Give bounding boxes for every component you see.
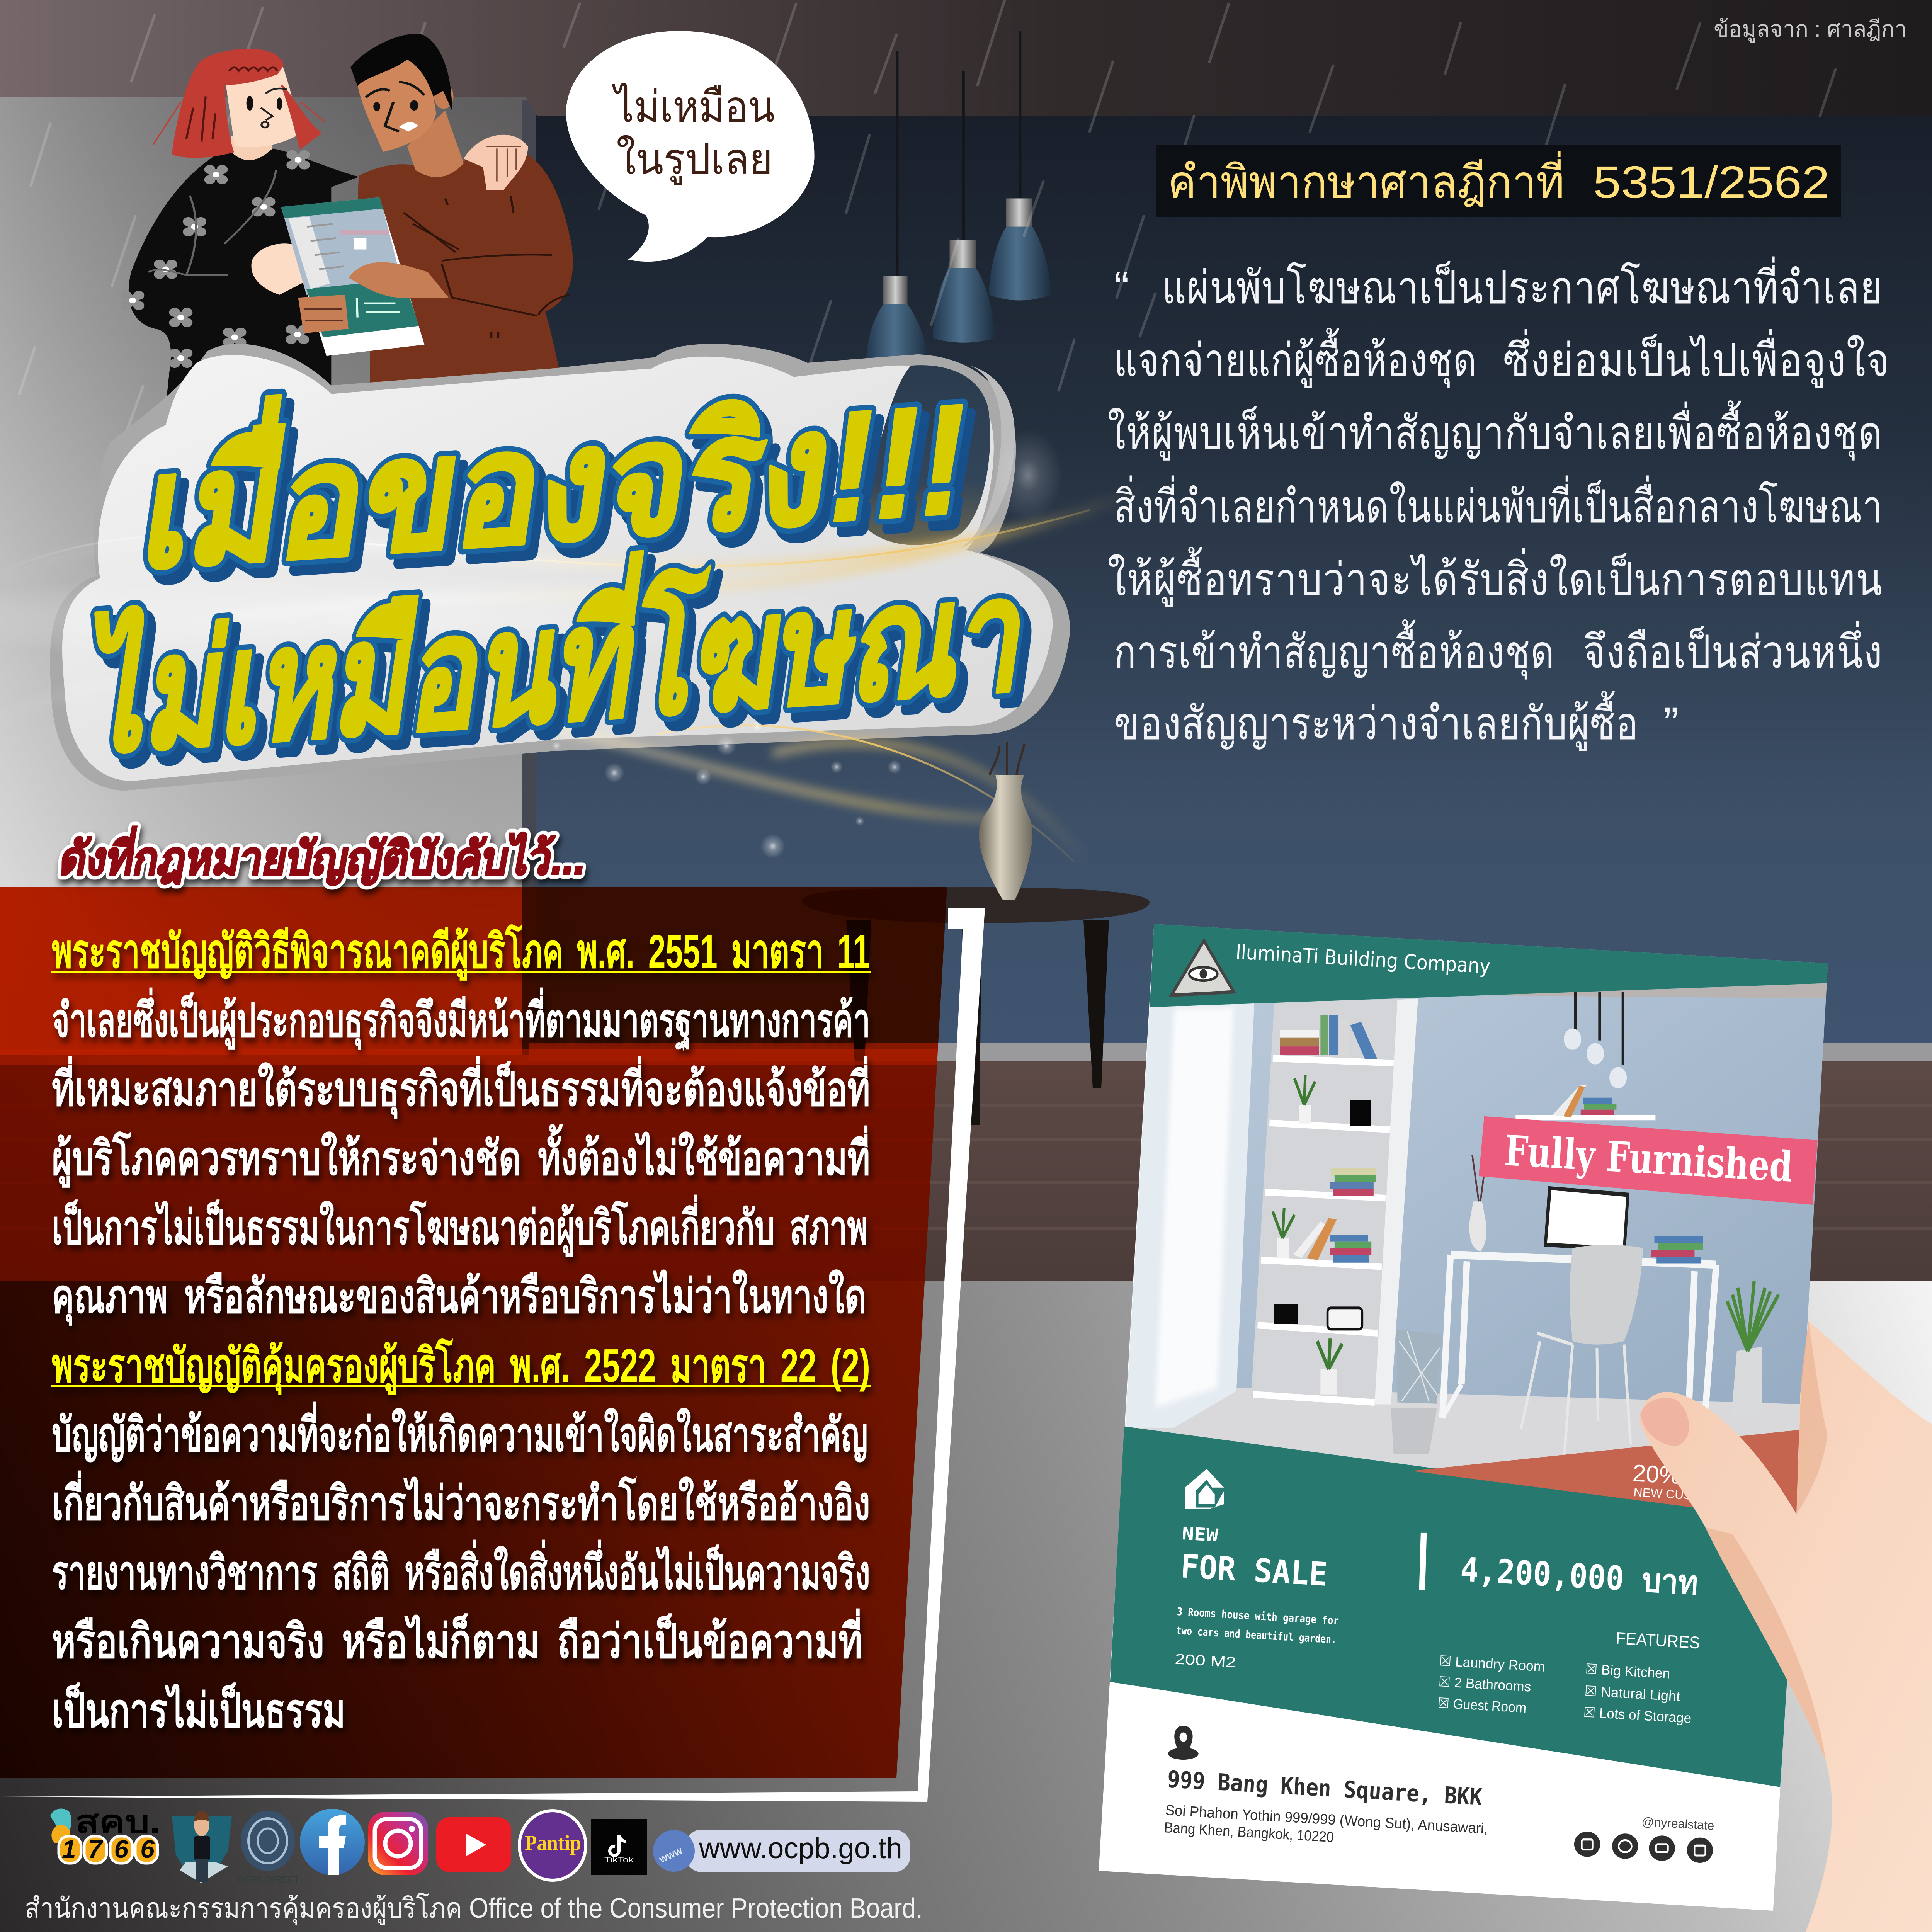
woman hand bbox=[252, 243, 307, 295]
title sign background bbox=[0, 344, 1159, 862]
pantip: Pantip bbox=[525, 1831, 581, 1855]
flyer text: Soi Phahon Yothin 999/999 (Wong Sut), Anusawari, bbox=[1165, 1802, 1488, 1837]
court ruling heading bbox=[1156, 145, 1841, 217]
couple illustration bbox=[121, 34, 573, 408]
law text: เป็นการไม่เป็นธรรมในการโฆษณาต่อผู้บริโภคเกี่ยวกับ สภาพ bbox=[52, 1194, 868, 1257]
company triangle logo bbox=[1171, 940, 1234, 995]
footer organisation name: สำนักงานคณะกรรมการคุ้มครองผู้บริโภค Office of the Consumer Protection Board. bbox=[25, 1892, 923, 1925]
bokeh lights bbox=[552, 721, 901, 859]
rain streaks bbox=[19, 0, 1835, 479]
court quote bbox=[1107, 256, 1890, 751]
website pill: www.ocpb.go.th bbox=[699, 1832, 902, 1865]
flyer text: ☒ Laundry Room bbox=[1439, 1653, 1545, 1675]
title line 1: เมื่อของจริง!!! bbox=[141, 358, 991, 610]
OCPB direct logo bbox=[238, 1811, 299, 1885]
location pin bbox=[1174, 1726, 1193, 1757]
OCPB direct logo: OCPB DIRECT bbox=[238, 1874, 299, 1885]
bulbs bbox=[1564, 992, 1627, 1088]
law heading 2 bbox=[51, 1338, 871, 1395]
flyer text: Fully Furnished bbox=[1503, 1126, 1794, 1192]
facebook bbox=[300, 1809, 365, 1875]
law text: ที่เหมะสมภายใต้ระบบธุรกิจที่เป็นธรรมที่จะต้องแจ้งข้อที่ bbox=[52, 1056, 870, 1119]
woman bbox=[121, 49, 359, 408]
room photo bbox=[1125, 983, 1827, 1468]
shelf unit bbox=[1251, 998, 1418, 1405]
law text: เป็นการไม่เป็นธรรม bbox=[52, 1682, 345, 1737]
สคบ. 1766 logo: สคบ. bbox=[75, 1804, 160, 1840]
law text bbox=[51, 924, 871, 1737]
desk bbox=[1442, 1255, 1716, 1418]
title line 2: ไม่เหมือนที่โฆษณา bbox=[78, 534, 1050, 795]
white frame bbox=[0, 908, 985, 1802]
pantip bbox=[519, 1811, 586, 1880]
title line 2: ไม่เหมือนที่โฆษณา bbox=[70, 524, 1042, 786]
flyer text: 3 Rooms house with garage for bbox=[1177, 1605, 1339, 1627]
flyer text: 999 Bang Khen Square, BKK bbox=[1167, 1766, 1483, 1811]
flyer text: IluminaTi Building Company bbox=[1235, 940, 1491, 978]
flyer text: ☒ Lots of Storage bbox=[1583, 1704, 1692, 1726]
man bbox=[350, 34, 573, 391]
tiktok bbox=[591, 1819, 647, 1875]
law text: หรือเกินความจริง หรือไม่ก็ตาม ถือว่าเป็นข้อความที่ bbox=[52, 1608, 862, 1668]
bubble text: ในรูปเลย bbox=[616, 135, 773, 185]
speech bubble bbox=[566, 31, 815, 262]
flyer teal blocks bbox=[1150, 924, 1828, 1007]
law text: ผู้บริโภคควรทราบให้กระจ่างชัด ทั้งต้องไม่ใช้ข้อความที่ bbox=[52, 1124, 870, 1188]
สคบ. 1766 logo bbox=[50, 1804, 160, 1863]
advertising flyer bbox=[1099, 924, 1841, 1911]
subheading: ดังที่กฎหมายบัญญัติบังคับไว้... bbox=[56, 826, 592, 885]
court quote: “ bbox=[1114, 262, 1130, 313]
instagram bbox=[368, 1812, 428, 1875]
woman hair bbox=[153, 49, 324, 157]
red law panel background bbox=[0, 887, 966, 1778]
สคบ. 1766 logo: 1766 bbox=[62, 1835, 155, 1863]
court quote: แจกจ่ายแก่ผู้ซื้อห้องชุด bbox=[1114, 328, 1477, 388]
law text: จำเลยซึ่งเป็นผู้ประกอบธุรกิจจึงมีหน้าที่ตามมาตรฐานทางการค้า bbox=[52, 987, 870, 1051]
flyer text: ☒ Guest Room bbox=[1437, 1695, 1527, 1716]
law text: คุณภาพ หรือลักษณะของสินค้าหรือบริการไม่ว่าในทางใด bbox=[52, 1269, 866, 1326]
law text: บัญญัติว่าข้อความที่จะก่อให้เกิดความเข้าใจผิดในสาระสำคัญ bbox=[52, 1401, 868, 1463]
flyer text: 20% bbox=[1632, 1460, 1681, 1489]
flyer text: FOR SALE bbox=[1180, 1547, 1328, 1594]
law heading 1: พระราชบัญญัติวิธีพิจารณาคดีผู้บริโภค พ.ศ. 2551 มาตรา 11 bbox=[52, 924, 870, 981]
court quote: จึงถือเป็นส่วนหนึ่ง bbox=[1583, 621, 1883, 678]
flyer text: ☒ Big Kitchen bbox=[1585, 1661, 1671, 1682]
vase bbox=[979, 742, 1032, 900]
flyer text: ☒ 2 Bathrooms bbox=[1438, 1673, 1532, 1695]
flyer text: NEW CUST bbox=[1633, 1485, 1700, 1503]
website pill: WWW bbox=[658, 1846, 684, 1865]
flyer text: Bang Khen, Bangkok, 10220 bbox=[1163, 1820, 1334, 1845]
flyer text bbox=[1163, 940, 1794, 1845]
divider bbox=[1419, 1533, 1427, 1590]
glow streaks bbox=[0, 483, 1159, 858]
court ruling heading: 5351/2562 bbox=[1593, 157, 1830, 208]
table bbox=[802, 887, 1150, 1125]
court quote: ของสัญญาระหว่างจำเลยกับผู้ซื้อ bbox=[1114, 691, 1639, 751]
house icon bbox=[1185, 1469, 1224, 1509]
law heading 2: พระราชบัญญัติคุ้มครองผู้บริโภค พ.ศ. 2522 มาตรา 22 (2) bbox=[52, 1338, 870, 1395]
pendant lamps bbox=[866, 31, 1051, 363]
flyer text: 200 M2 bbox=[1174, 1651, 1236, 1671]
wall shelf and books bbox=[1515, 1115, 1655, 1120]
social icons bbox=[1574, 1832, 1713, 1863]
bubble text bbox=[612, 83, 775, 185]
hole bbox=[852, 365, 990, 545]
tiktok: TikTok bbox=[604, 1856, 634, 1864]
court quote: การเข้าทำสัญญาซื้อห้องชุด bbox=[1114, 619, 1555, 680]
youtube bbox=[436, 1817, 511, 1872]
hand holding flyer bbox=[1640, 1321, 1932, 1932]
sign front bbox=[62, 355, 1053, 781]
court quote: ” bbox=[1663, 698, 1679, 749]
title line 1: เมื่อของจริง!!! bbox=[133, 349, 983, 600]
website pill bbox=[653, 1830, 910, 1872]
footer logos bbox=[50, 1804, 910, 1885]
flyer text: ☒ Natural Light bbox=[1584, 1683, 1680, 1704]
source credit: ข้อมูลจาก : ศาลฎีกา bbox=[1714, 17, 1907, 43]
law heading 1 bbox=[51, 924, 871, 981]
pink banner bbox=[1479, 1116, 1818, 1205]
title line 2: ไม่เหมือนที่โฆษณา bbox=[70, 524, 1042, 786]
court ruling heading: คำพิพากษาศาลฎีกาที่ bbox=[1168, 151, 1565, 208]
flyer text: @nyrealstate bbox=[1641, 1815, 1714, 1833]
flyer text: two cars and beautiful garden. bbox=[1176, 1624, 1337, 1646]
law text: เกี่ยวกับสินค้าหรือบริการไม่ว่าจะกระทำโดยใช้หรืออ้างอิง bbox=[52, 1470, 870, 1530]
bubble text: ไม่เหมือน bbox=[612, 83, 775, 131]
flyer text: 4,200,000 บาท bbox=[1459, 1550, 1699, 1602]
mascot bbox=[172, 1811, 232, 1883]
law text: รายงานทางวิชาการ สถิติ หรือสิ่งใดสิ่งหนึ่งอันไม่เป็นความจริง bbox=[52, 1539, 870, 1599]
woman face bbox=[247, 96, 253, 111]
flyer text: FEATURES bbox=[1615, 1629, 1701, 1653]
sign 3D back bbox=[50, 344, 1070, 791]
title line 1: เมื่อของจริง!!! bbox=[133, 349, 983, 600]
flyer text: NEW bbox=[1181, 1523, 1219, 1546]
small flyer held bbox=[281, 197, 424, 356]
subheading: ดังที่กฎหมายบัญญัติบังคับไว้... bbox=[56, 826, 592, 885]
